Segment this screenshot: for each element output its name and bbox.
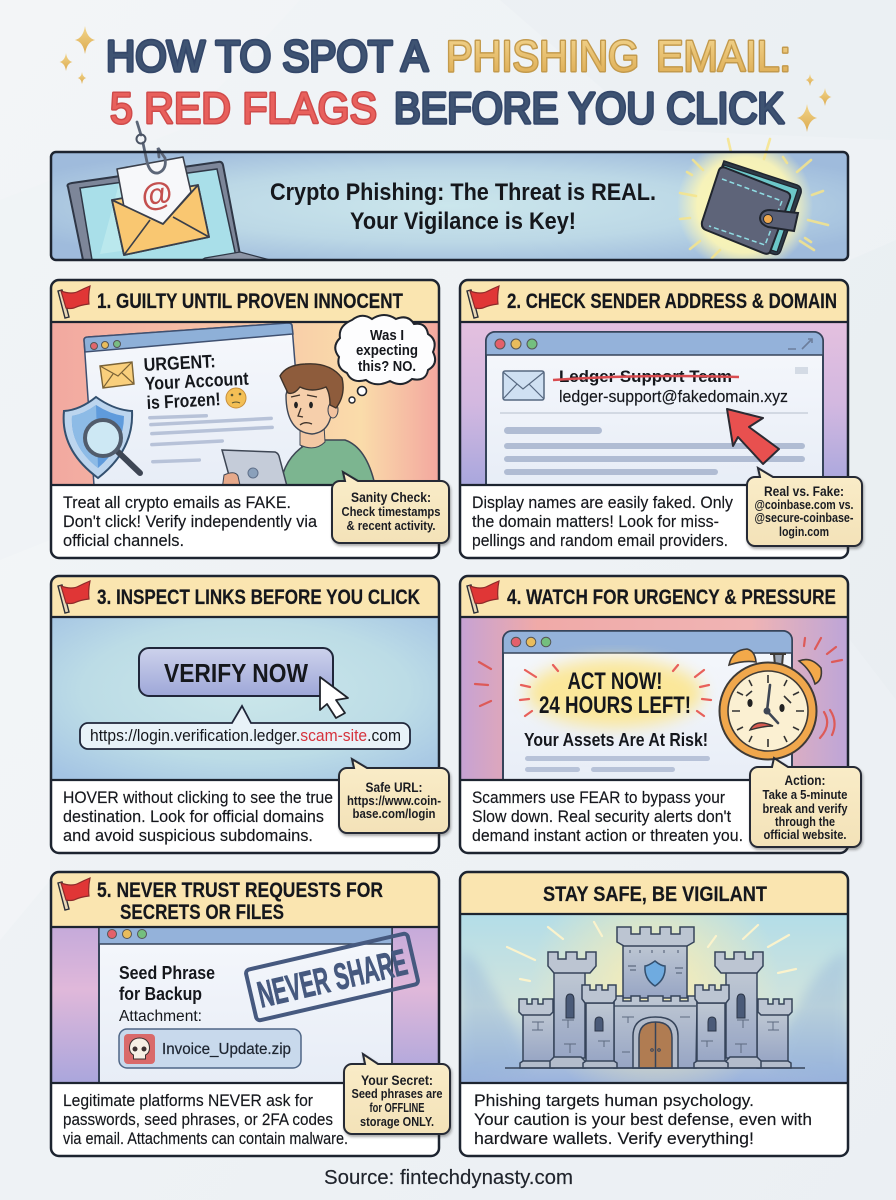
flag icon [467, 581, 499, 613]
callout: sanity check: Check timestamps [342, 505, 441, 519]
callout: sanity check [332, 472, 449, 543]
icon: worried alarm clock [720, 649, 821, 760]
url tooltip [80, 706, 410, 749]
panel 1 heading: 1. GUILTY UNTIL PROVEN INNOCENT [97, 290, 403, 313]
email client window [486, 332, 823, 502]
title [106, 32, 791, 133]
attachment chip: Invoice_Update.zip [162, 1041, 291, 1058]
red burst marks [475, 638, 842, 738]
panel: 2 check sender address and domain [460, 280, 862, 558]
panel 6 header band [460, 872, 848, 914]
thought cloud: this? NO. [358, 359, 416, 375]
banner [51, 122, 848, 273]
flag icon [58, 286, 90, 318]
url tooltip: https://login.verification.ledger.scam-site.com [90, 727, 401, 745]
email body lines [525, 756, 710, 772]
panel 2 body text: pellings and random email providers. [472, 531, 728, 550]
callout: your secret: Your Secret: [361, 1073, 433, 1088]
panel 3 body text: destination. Look for official domains [63, 807, 324, 826]
callout: real vs fake: login.com [779, 525, 829, 539]
panel 5 body text: passwords, seed phrases, or 2FA codes [63, 1110, 333, 1129]
panel 1 header band [51, 280, 439, 322]
alarm text with glow [520, 659, 711, 727]
light rays [507, 922, 796, 981]
title word group: 5 red flags: 5 RED FLAGS [110, 84, 377, 133]
alarm text with glow: 24 HOURS LEFT! [539, 692, 691, 719]
panel 2 body text: the domain matters! Look for miss- [472, 512, 719, 531]
callout: your secret: for OFFLINE [370, 1101, 424, 1115]
panel: 5 never trust requests for secrets or files [51, 872, 450, 1156]
icon: shield with magnifier [64, 397, 140, 478]
callout: action: break and verify [762, 802, 848, 816]
panel 2 header band [460, 280, 848, 322]
email body lines [504, 427, 805, 475]
panel: 3 inspect links before you click [51, 576, 449, 853]
callout: action [750, 758, 861, 847]
email headline: Your Account [144, 368, 249, 394]
panel 3 illustration [51, 617, 439, 780]
panel: 1 guilty until proven innocent [51, 280, 449, 558]
panel 3 body text: and avoid suspicious subdomains. [63, 826, 313, 845]
panel 1 body text: Treat all crypto emails as FAKE. [63, 493, 291, 512]
panel 3 body text [63, 788, 333, 845]
callout: your secret: Seed phrases are [352, 1087, 443, 1101]
sender address: ledger-support@fakedomain.xyz [559, 387, 788, 406]
email body lines [148, 414, 274, 463]
panel 5 body text: Legitimate platforms NEVER ask for [63, 1091, 313, 1110]
verify now button [139, 648, 333, 696]
banner frame [51, 152, 848, 260]
panel 4 body text [472, 788, 743, 845]
email headline: is Frozen! [146, 388, 221, 413]
verify now button: VERIFY NOW [164, 658, 308, 688]
callout: action: through the [775, 815, 835, 829]
panel 5 heading [97, 879, 383, 924]
banner text: Crypto Phishing: The Threat is REAL. [270, 179, 656, 206]
callout: real vs fake [747, 468, 862, 546]
title word: phishing: PHISHING [446, 32, 639, 81]
panel 1 body text: Don't click! Verify independently via [63, 512, 318, 531]
panel 1 body text [63, 493, 318, 550]
warning line: Your Assets Are At Risk! [524, 730, 708, 750]
callout: real vs fake: Real vs. Fake: [764, 484, 844, 499]
thought cloud: Was I [370, 328, 404, 344]
icon: castle [505, 927, 805, 1068]
callout: your secret [344, 1054, 450, 1134]
panel 3 heading: 3. INSPECT LINKS BEFORE YOU CLICK [97, 586, 420, 609]
panel 4 body text: Slow down. Real security alerts don't [472, 807, 731, 826]
icon: fishing hook and envelope [112, 122, 209, 255]
icon: thinking face [226, 388, 246, 408]
icon: mouse cursor [320, 677, 348, 718]
sparkles [60, 26, 831, 132]
fake display name: Ledger Support Team [559, 368, 732, 386]
icon: fishing hook and envelope: @ [139, 174, 175, 214]
title word: email: EMAIL: [656, 32, 791, 81]
callout: safe url: Safe URL: [366, 780, 422, 795]
callout: your secret: storage ONLY. [360, 1115, 434, 1129]
panel 6 illustration [460, 860, 848, 1110]
arrow pointing to domain [727, 409, 779, 464]
panel: stay safe be vigilant [460, 860, 848, 1156]
panel 3 body text: HOVER without clicking to see the true [63, 788, 333, 807]
callout: action: Take a 5-minute [762, 788, 848, 802]
panel 3 header band [51, 576, 439, 617]
callout: safe url: https://www.coin- [347, 794, 441, 808]
source line: Source: fintechdynasty.com [324, 1167, 573, 1189]
alert window [502, 630, 793, 779]
attachment chip [119, 1029, 301, 1068]
secret request window [98, 928, 393, 1082]
icon: laptop [68, 162, 270, 261]
panel 6 body text: hardware wallets. Verify everything! [474, 1129, 754, 1148]
panel 2 body text: Display names are easily faked. Only [472, 493, 733, 512]
panel 5 illustration [52, 928, 438, 1082]
callout: action: Action: [784, 773, 826, 788]
panel 1 body text: official channels. [63, 531, 184, 550]
panel 5 body text [63, 1091, 348, 1148]
seed phrase heading: Seed Phrase [119, 963, 215, 983]
icon: glowing wallet [678, 138, 830, 259]
thought cloud: expecting [356, 343, 418, 359]
flag icon [58, 581, 90, 613]
panel 4 header band [460, 576, 848, 617]
panel 4 illustration [461, 618, 847, 779]
callout: real vs fake: @coinbase.com vs. [754, 498, 854, 512]
title word group: before you click: BEFORE YOU CLICK [394, 84, 784, 133]
panel: 4 watch for urgency and pressure [460, 576, 861, 853]
never share stamp: NEVER SHARE [254, 941, 411, 1016]
panel 4 body text: demand instant action or threaten you. [472, 826, 743, 845]
person with tablet [222, 364, 376, 490]
panel 5 heading: 5. NEVER TRUST REQUESTS FOR [97, 879, 383, 902]
icon: envelope [503, 371, 544, 400]
callout: sanity check: Sanity Check: [351, 490, 431, 505]
flag icon [467, 286, 499, 318]
callout: safe url: base.com/login [352, 807, 436, 821]
attachment label: Attachment: [119, 1008, 202, 1025]
callout: sanity check: & recent activity. [346, 519, 436, 533]
flag icon [58, 878, 90, 910]
never share stamp [245, 933, 419, 1021]
panel 2 illustration [461, 323, 847, 484]
panel 6 body text: Your caution is your best defense, even with [474, 1110, 812, 1129]
alarm text with glow: ACT NOW! [568, 668, 662, 695]
seed phrase heading: for Backup [119, 984, 202, 1004]
browser window [83, 323, 302, 484]
panel 4 body text: Scammers use FEAR to bypass your [472, 788, 725, 807]
panel 6 body text [474, 1091, 812, 1148]
callout: safe url [339, 759, 449, 833]
panel 2 body text [472, 493, 733, 550]
panel 5 header band [51, 872, 439, 927]
panel 5 heading: SECRETS OR FILES [120, 901, 284, 924]
panel 6 heading: STAY SAFE, BE VIGILANT [543, 883, 767, 906]
thought cloud [335, 315, 435, 403]
panel 6 body text: Phishing targets human psychology. [474, 1091, 754, 1110]
banner text line two: Your Vigilance is Key! [350, 208, 576, 235]
callout: action: official website. [764, 828, 846, 842]
callout: real vs fake: @secure-coinbase- [754, 511, 854, 525]
panel 5 body text: via email. Attachments can contain malware. [63, 1129, 348, 1148]
seed phrase heading [119, 963, 215, 1004]
email headline: URGENT: [143, 350, 216, 375]
email headline [144, 354, 249, 409]
panel 1 illustration [52, 323, 438, 484]
title word group: how to spot a: HOW TO SPOT A [106, 32, 429, 81]
